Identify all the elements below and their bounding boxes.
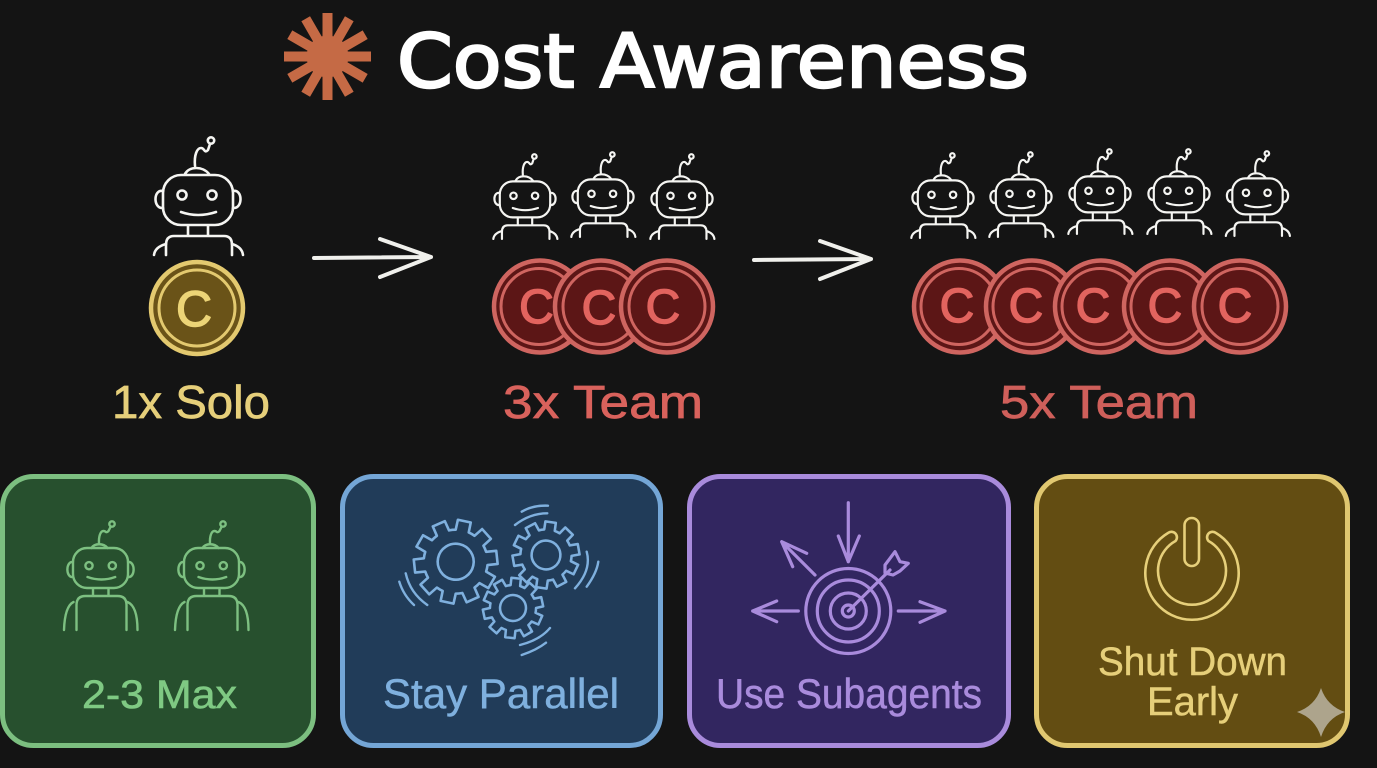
icon: title starburst bbox=[284, 13, 371, 100]
panel background bbox=[690, 476, 1008, 746]
icon: target with arrows bbox=[753, 503, 945, 654]
icon: power symbol bbox=[1145, 518, 1239, 620]
label: 2-3 Max: 2-3 Max bbox=[82, 673, 237, 717]
panel: shut down early bbox=[1036, 476, 1348, 746]
panel background bbox=[2, 476, 314, 746]
icons: three red coins bbox=[494, 260, 713, 352]
title: Cost Awareness bbox=[397, 19, 1029, 105]
icons: three red coins: C bbox=[582, 282, 616, 335]
panel: 2-3 max bbox=[2, 476, 314, 746]
icons: five red coins: C bbox=[1009, 280, 1043, 333]
panel: use subagents bbox=[690, 476, 1008, 746]
icons: five robots bbox=[911, 149, 1290, 238]
group: 1x solo bbox=[112, 137, 270, 428]
label: Shut Down Early: Shut Down bbox=[1098, 640, 1287, 684]
arrow: 3x team to 5x team bbox=[754, 241, 871, 279]
icon: robot bbox=[154, 137, 243, 255]
label: 3x Team: 3x Team bbox=[503, 376, 703, 428]
icons: three red coins: C bbox=[519, 281, 554, 334]
icon: gold coin: C bbox=[176, 281, 212, 337]
icon: gears bbox=[399, 506, 598, 655]
label: 5x Team: 5x Team bbox=[1000, 376, 1198, 428]
group: 3x team bbox=[493, 152, 714, 428]
icon: sparkle watermark bbox=[1297, 688, 1345, 737]
panel background bbox=[342, 476, 660, 746]
icons: three red coins: C bbox=[646, 281, 680, 334]
panel background bbox=[1036, 476, 1348, 746]
icons: three robots bbox=[493, 152, 714, 239]
label: Shut Down Early: Early bbox=[1147, 680, 1238, 724]
label: 1x Solo: 1x Solo bbox=[112, 376, 270, 428]
arrow: solo to 3x team bbox=[314, 239, 431, 277]
icon: gold coin bbox=[151, 262, 243, 354]
icons: five red coins: C bbox=[940, 280, 974, 333]
icon: two robots bbox=[64, 521, 248, 630]
icons: five red coins: C bbox=[1218, 280, 1252, 333]
icons: five red coins: C bbox=[1076, 280, 1110, 333]
icons: five red coins: C bbox=[1148, 280, 1182, 333]
group: 5x team bbox=[911, 149, 1290, 428]
label: Use Subagents: Use Subagents bbox=[716, 670, 982, 717]
panel: stay parallel bbox=[342, 476, 660, 746]
icons: five red coins bbox=[914, 260, 1286, 352]
label: Stay Parallel: Stay Parallel bbox=[383, 670, 619, 717]
